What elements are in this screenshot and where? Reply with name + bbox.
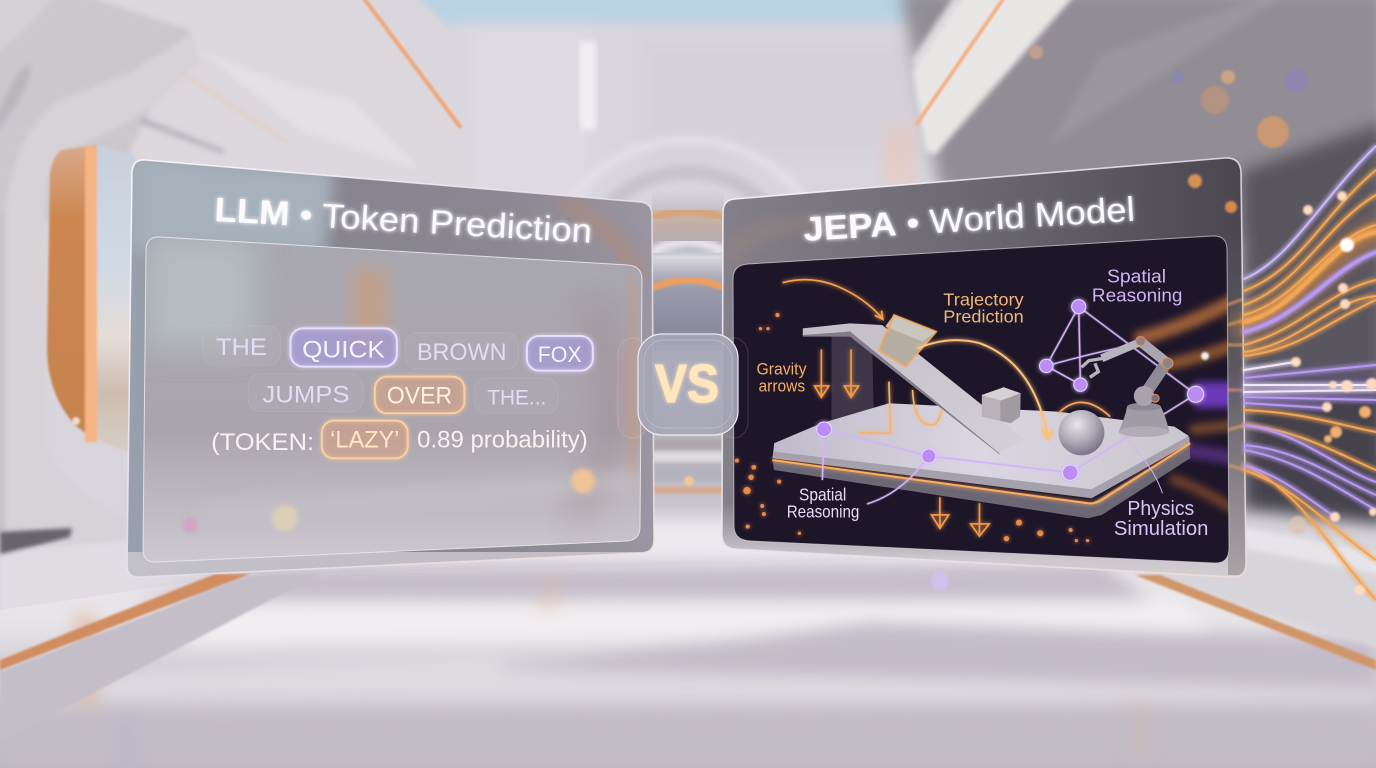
robot arm	[1081, 336, 1173, 437]
label: spatial reasoning top: Reasoning	[1092, 284, 1182, 305]
purple fibres	[1244, 146, 1376, 517]
glass edges	[722, 158, 1246, 577]
dark simulation card	[725, 230, 1235, 570]
label: trajectory prediction: Prediction	[943, 307, 1024, 327]
label: physics simulation: Physics	[1127, 498, 1194, 520]
network lines	[822, 307, 1196, 504]
token: FOX: FOX	[538, 342, 582, 367]
glass support	[831, 335, 874, 428]
glass edges	[127, 160, 654, 577]
panel glass body	[120, 150, 660, 592]
arc over sphere	[1058, 402, 1110, 417]
token: THE: THE	[216, 334, 267, 361]
bokeh lights upper right	[931, 45, 1308, 590]
physics scene	[735, 265, 1208, 542]
trajectory arrow	[918, 340, 1053, 439]
ramp	[803, 323, 1026, 455]
cube on ramp	[879, 315, 936, 367]
label: spatial reasoning top: Spatial	[1107, 265, 1166, 286]
floor	[0, 555, 1376, 768]
sky opening	[415, 0, 955, 27]
fibre light nodes	[1289, 191, 1376, 595]
token sentence	[203, 326, 593, 458]
panel glass body	[715, 150, 1255, 590]
orange fibres	[1244, 170, 1376, 600]
token: LAZY	[322, 421, 408, 458]
orange ceiling strip left	[363, 0, 461, 128]
token: THE...: THE...	[487, 385, 546, 409]
title: LLM • Token Prediction	[214, 191, 593, 251]
token: OVER: OVER	[387, 383, 452, 410]
network nodes	[817, 300, 1204, 480]
token: QUICK	[290, 328, 397, 367]
token: LAZY: ‘LAZY’	[330, 426, 399, 453]
token: THE	[203, 326, 280, 365]
VS badge	[618, 334, 748, 438]
sphere	[1058, 410, 1104, 455]
label: physics simulation: Simulation	[1114, 518, 1208, 540]
incoming arrow	[782, 280, 883, 319]
token: FOX	[527, 336, 593, 371]
orange bent tube	[858, 382, 941, 433]
panel: JEPA world model	[715, 150, 1255, 590]
probability value: 0.89 probability)	[417, 427, 588, 454]
title: JEPA • World Model	[802, 191, 1136, 249]
tunnel rings	[652, 190, 724, 525]
label: trajectory prediction: Trajectory	[943, 289, 1025, 309]
panel: LLM token prediction	[120, 150, 660, 592]
label: gravity arrows: Gravity	[756, 359, 807, 378]
token: OVER	[375, 377, 464, 413]
probability line: (TOKEN:	[211, 429, 314, 456]
label: spatial reasoning bottom: Reasoning	[787, 502, 859, 522]
token: QUICK: QUICK	[302, 337, 385, 364]
fibre glow bands	[1244, 232, 1376, 388]
data fibres emerging from JEPA panel	[1244, 146, 1376, 600]
right wall	[900, 0, 1376, 525]
platform	[772, 403, 1190, 518]
token: BROWN	[405, 333, 518, 369]
label: spatial reasoning bottom: Spatial	[799, 485, 846, 505]
small cube	[982, 387, 1021, 423]
label: gravity arrows: arrows	[759, 376, 805, 395]
particles	[735, 313, 1089, 542]
VS text: VS	[655, 354, 719, 414]
physics leader line	[1120, 433, 1163, 493]
left wall	[0, 0, 480, 566]
token: BROWN: BROWN	[417, 339, 506, 366]
token: THE...	[475, 378, 558, 413]
token: JUMPS: JUMPS	[262, 381, 350, 408]
token: JUMPS	[248, 374, 363, 412]
inner glass card	[144, 238, 642, 562]
gravity arrows	[815, 349, 989, 536]
